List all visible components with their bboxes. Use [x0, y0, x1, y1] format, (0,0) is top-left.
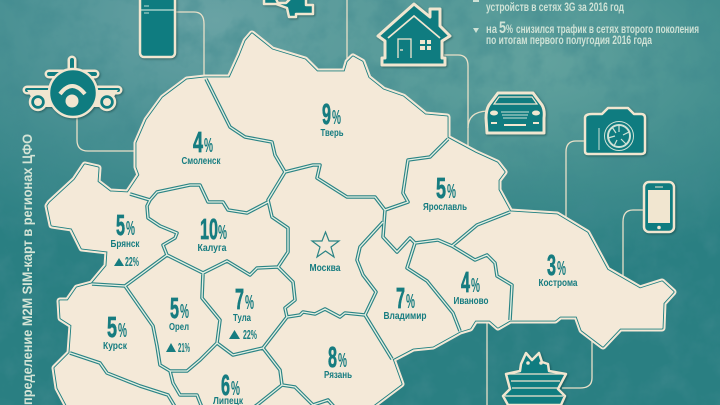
icon: camera: [585, 108, 645, 154]
vertical title: пределение M2M SIM-карт в регионах ЦФО: [19, 134, 35, 405]
region: Брянск: 5: [116, 210, 125, 242]
icon: car: [486, 93, 544, 133]
region: Кострома: 3: [547, 250, 556, 282]
map of the Central Federal District: 21%: [178, 341, 190, 355]
region: Тула: 22%: [243, 328, 257, 342]
icon: partly cropped top icon: [264, 0, 313, 17]
region: Рязань: [324, 342, 352, 381]
icon: smartphone: [644, 182, 674, 232]
region: Рязань: Рязань: [324, 369, 352, 381]
region: Липецк: %: [231, 378, 240, 400]
region: Иваново: %: [471, 275, 480, 297]
text block: statistics: устройств в сетях 3G за 2016 год: [486, 0, 624, 14]
region: Ярославль: %: [447, 181, 456, 203]
region: Тула: 7: [235, 284, 244, 316]
region: Иваново: [454, 267, 488, 307]
region: Курск: Курск: [103, 340, 128, 352]
region: Ярославль: Ярославль: [423, 201, 467, 213]
region: Тверь: Тверь: [320, 127, 344, 139]
region: Иваново: 4: [461, 267, 470, 299]
region: Рязань: %: [338, 350, 347, 372]
region: Брянск: Брянск: [110, 238, 140, 250]
text block: statistics: по итогам первого полугодия 2016 года: [486, 33, 652, 47]
text block: statistics: %: [506, 22, 513, 36]
region: Рязань: 8: [328, 342, 337, 374]
region: Смоленск: Смоленск: [182, 155, 221, 167]
text block: statistics: 5: [499, 18, 506, 37]
region: Липецк: 6: [221, 370, 230, 402]
icon: ship: [503, 353, 566, 405]
region: Иваново: Иваново: [454, 295, 488, 307]
region: Брянск: %: [126, 218, 135, 240]
region: Ярославль: 5: [436, 173, 446, 205]
region: Курск: %: [118, 320, 127, 342]
region: Курск: 5: [107, 312, 117, 344]
region: Орел: 5: [170, 293, 179, 325]
region: Тула: Тула: [233, 312, 251, 324]
region: Тверь: 9: [322, 99, 331, 131]
region: Владимир: 7: [396, 283, 405, 315]
region: Орел: %: [180, 301, 189, 323]
region: Брянск: [110, 210, 140, 269]
region: Владимир: Владимир: [384, 310, 426, 322]
region: Кострома: Кострома: [538, 277, 578, 289]
region: Тула: [229, 284, 257, 342]
region: Калуга: %: [218, 222, 227, 244]
region: Смоленск: 4: [193, 127, 203, 159]
region: Владимир: %: [406, 291, 415, 313]
region: Тверь: %: [332, 107, 341, 129]
region: Тула: %: [245, 292, 254, 314]
region: Брянск: 22%: [125, 255, 139, 269]
region: Москва: Москва: [310, 262, 341, 274]
connector lines between icons and map: [77, 0, 645, 405]
text block: statistics: на: [486, 22, 497, 36]
region: Ярославль: [423, 173, 467, 213]
icon: house: [378, 4, 450, 65]
region: Калуга: [198, 214, 227, 254]
region: Смоленск: %: [204, 135, 213, 157]
region: Тверь: [320, 99, 344, 139]
region: Липецк: [213, 370, 244, 405]
icon: airplane: [27, 60, 118, 117]
region: Кострома: [538, 250, 578, 289]
region: Курск: [103, 312, 128, 352]
region: Владимир: [384, 283, 426, 322]
region: Калуга: 10: [200, 214, 218, 246]
region: Орел: Орел: [169, 321, 189, 333]
region: Смоленск: [182, 127, 221, 167]
region: Калуга: Калуга: [198, 242, 227, 254]
text block: statistics: [473, 0, 699, 47]
icon: fridge: [140, 0, 175, 57]
map of the Central Federal District: [48, 34, 673, 405]
region: Кострома: %: [557, 258, 566, 280]
region: Орел: [166, 293, 190, 355]
region: Москва: [310, 232, 341, 274]
